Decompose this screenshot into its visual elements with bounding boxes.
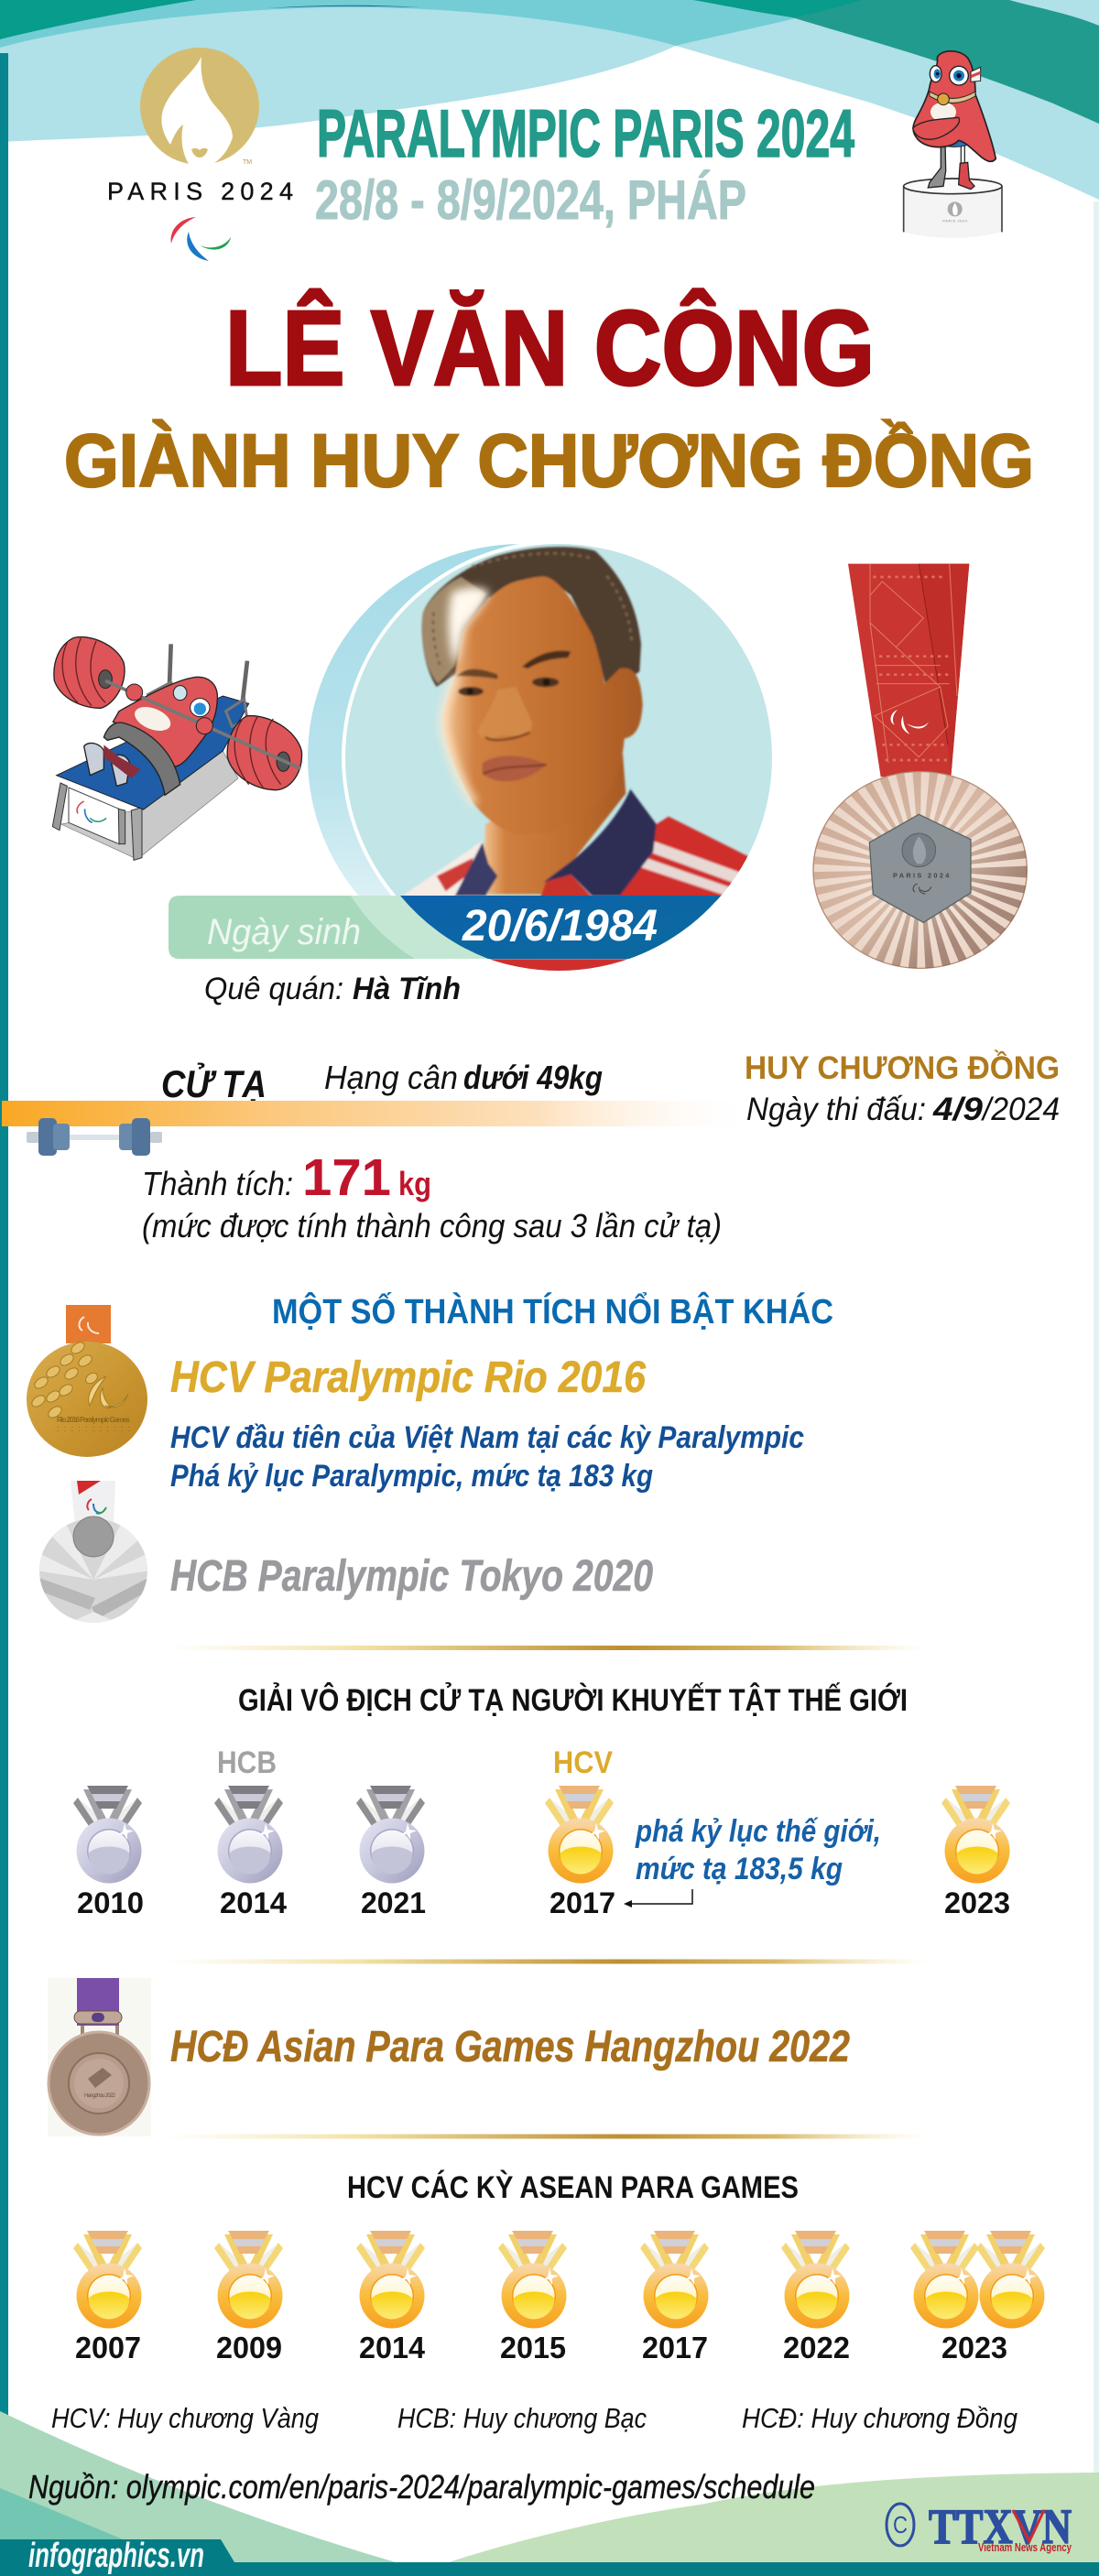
logo: Paris 2024	[107, 48, 293, 205]
bottom wave footer	[0, 2411, 1099, 2576]
section heading: other achievements: MỘT SỐ THÀNH TÍCH NỔI BẬT KHÁC	[272, 1290, 833, 1331]
competition date: 4/9	[932, 1092, 984, 1127]
green date pill	[169, 896, 488, 959]
icon: dumbbell	[27, 1118, 162, 1156]
birth date band: 20/6/1984	[462, 902, 658, 951]
world record note: phá kỷ lục thế giới,	[635, 1814, 881, 1849]
ASEAN two medals 2023: 2023	[941, 2331, 1007, 2364]
competition date: /2024	[981, 1092, 1060, 1127]
ASEAN medal 2022: 2022	[783, 2331, 850, 2364]
hometown	[204, 972, 461, 1006]
photo	[401, 545, 748, 971]
weight class: Hạng cân	[324, 1059, 458, 1096]
portrait circle	[342, 540, 776, 974]
birth date band	[400, 896, 721, 959]
world championship medal 2017: 2017	[550, 1886, 615, 1919]
Rio heading: HCV Paralympic Rio 2016	[170, 1353, 646, 1402]
mascot on pedestal: PARIS 2024	[942, 218, 968, 223]
top wave banner	[0, 0, 1099, 200]
ASEAN medal 2007: 2007	[75, 2331, 141, 2364]
crescent behind portrait	[308, 544, 518, 896]
illustration: mascot bench press	[52, 637, 302, 860]
section heading: ASEAN Para Games: HCV CÁC KỲ ASEAN PARA GAMES	[347, 2170, 799, 2205]
legend: bronze: HCĐ: Huy chương Đồng	[742, 2402, 1017, 2434]
orange gradient bar	[2, 1101, 744, 1126]
logo: Paris 2024: TM	[243, 159, 252, 166]
medal: Asian Para Games bronze: Hangzhou 2022	[84, 2093, 116, 2099]
website footer label: infographics.vn	[28, 2537, 204, 2575]
world championship medal 2010	[73, 1786, 144, 1919]
ASEAN medal 2007	[73, 2231, 142, 2364]
arrow to 2017	[624, 1889, 692, 1908]
Rio details: Phá kỷ lục Paralympic, mức tạ 183 kg	[170, 1459, 653, 1494]
ASEAN medal 2015	[498, 2231, 567, 2364]
ASEAN medal 2009: 2009	[216, 2331, 282, 2364]
world championship medal 2021	[356, 1786, 426, 1919]
world championship medal 2014: 2014	[220, 1886, 287, 1919]
world record note: mức tạ 183,5 kg	[636, 1852, 843, 1886]
label: HCB: HCB	[217, 1745, 277, 1780]
Rio details	[170, 1420, 804, 1494]
legend: silver: HCB: Huy chương Bạc	[397, 2402, 647, 2434]
mascot on pedestal	[904, 51, 1002, 238]
logo: Paris 2024: PARIS 2024	[107, 178, 293, 205]
ASEAN medal 2017: 2017	[642, 2331, 708, 2364]
world championship medal 2017	[545, 1786, 615, 1919]
hometown: Hà Tĩnh	[353, 972, 461, 1006]
result: Thành tích:	[142, 1165, 293, 1202]
result: 171	[302, 1148, 391, 1207]
label: HCV: HCV	[553, 1745, 613, 1780]
ASEAN two medals 2023	[910, 2231, 1045, 2364]
world championship medal 2010: 2010	[77, 1886, 144, 1919]
result	[142, 1148, 431, 1207]
main name heading: LÊ VĂN CÔNG	[225, 288, 875, 408]
weight class: dưới 49kg	[463, 1059, 603, 1096]
competition date	[746, 1092, 1060, 1127]
portrait of Lê Văn Công	[169, 540, 815, 974]
ASEAN medal 2022	[781, 2231, 850, 2364]
world championship medal 2023: 2023	[944, 1886, 1010, 1919]
medal: Tokyo 2020 silver	[37, 1481, 150, 1625]
Tokyo heading: HCB Paralympic Tokyo 2020	[170, 1552, 653, 1601]
medal: Rio 2016 gold: Rio 2016 Paralympic Games	[57, 1416, 131, 1424]
ASEAN medal 2009	[214, 2231, 283, 2364]
world record note	[635, 1814, 881, 1886]
source: Nguồn: olympic.com/en/paris-2024/paralympic-games/schedule	[28, 2468, 815, 2505]
world championship medal 2021: 2021	[361, 1886, 426, 1919]
Asian Para Games heading: HCĐ Asian Para Games Hangzhou 2022	[170, 2023, 850, 2071]
world championship medal 2014	[214, 1786, 287, 1919]
hometown: Quê quán:	[204, 972, 343, 1006]
ASEAN medal 2014	[356, 2231, 426, 2364]
green date pill: Ngày sinh	[207, 912, 361, 952]
ASEAN medal 2014: 2014	[359, 2331, 426, 2364]
logo: Paralympic agitos	[171, 217, 231, 261]
competition date: Ngày thi đấu:	[746, 1092, 926, 1127]
ASEAN medal 2015: 2015	[500, 2331, 566, 2364]
TTXVN logo: TTXVN	[929, 2499, 1072, 2554]
Rio details: HCV đầu tiên của Việt Nam tại các kỳ Paralympic	[170, 1420, 804, 1455]
result note: (mức được tính thành công sau 3 lần cử tạ)	[142, 1207, 722, 1245]
Paris bronze medal with ribbon	[813, 564, 1027, 968]
weight class heading: weightlifting: CỬ TẠ	[161, 1061, 267, 1105]
TTXVN logo	[887, 2499, 1072, 2554]
world championship medal 2023	[941, 1786, 1010, 1919]
result: kg	[398, 1165, 431, 1202]
medal: Rio 2016 gold	[27, 1305, 147, 1457]
ASEAN medal 2017	[640, 2231, 709, 2364]
Paris bronze medal with ribbon: PARIS 2024	[893, 871, 950, 879]
TTXVN logo: C	[893, 2511, 908, 2538]
medal: Asian Para Games bronze	[48, 1978, 151, 2136]
section heading: world championships: GIẢI VÔ ĐỊCH CỬ TẠ NGƯỜI KHUYẾT TẬT THẾ GIỚI	[238, 1682, 908, 1718]
weight class	[324, 1059, 603, 1096]
legend: gold: HCV: Huy chương Vàng	[51, 2402, 319, 2434]
bronze medal label: HUY CHƯƠNG ĐỒNG	[745, 1049, 1060, 1086]
header dates: 28/8 - 8/9/2024, PHÁP	[315, 169, 746, 231]
medal: Rio 2016 gold: : : : : : : : : : : :	[57, 1424, 130, 1433]
sub heading: GIÀNH HUY CHƯƠNG ĐỒNG	[64, 419, 1034, 503]
